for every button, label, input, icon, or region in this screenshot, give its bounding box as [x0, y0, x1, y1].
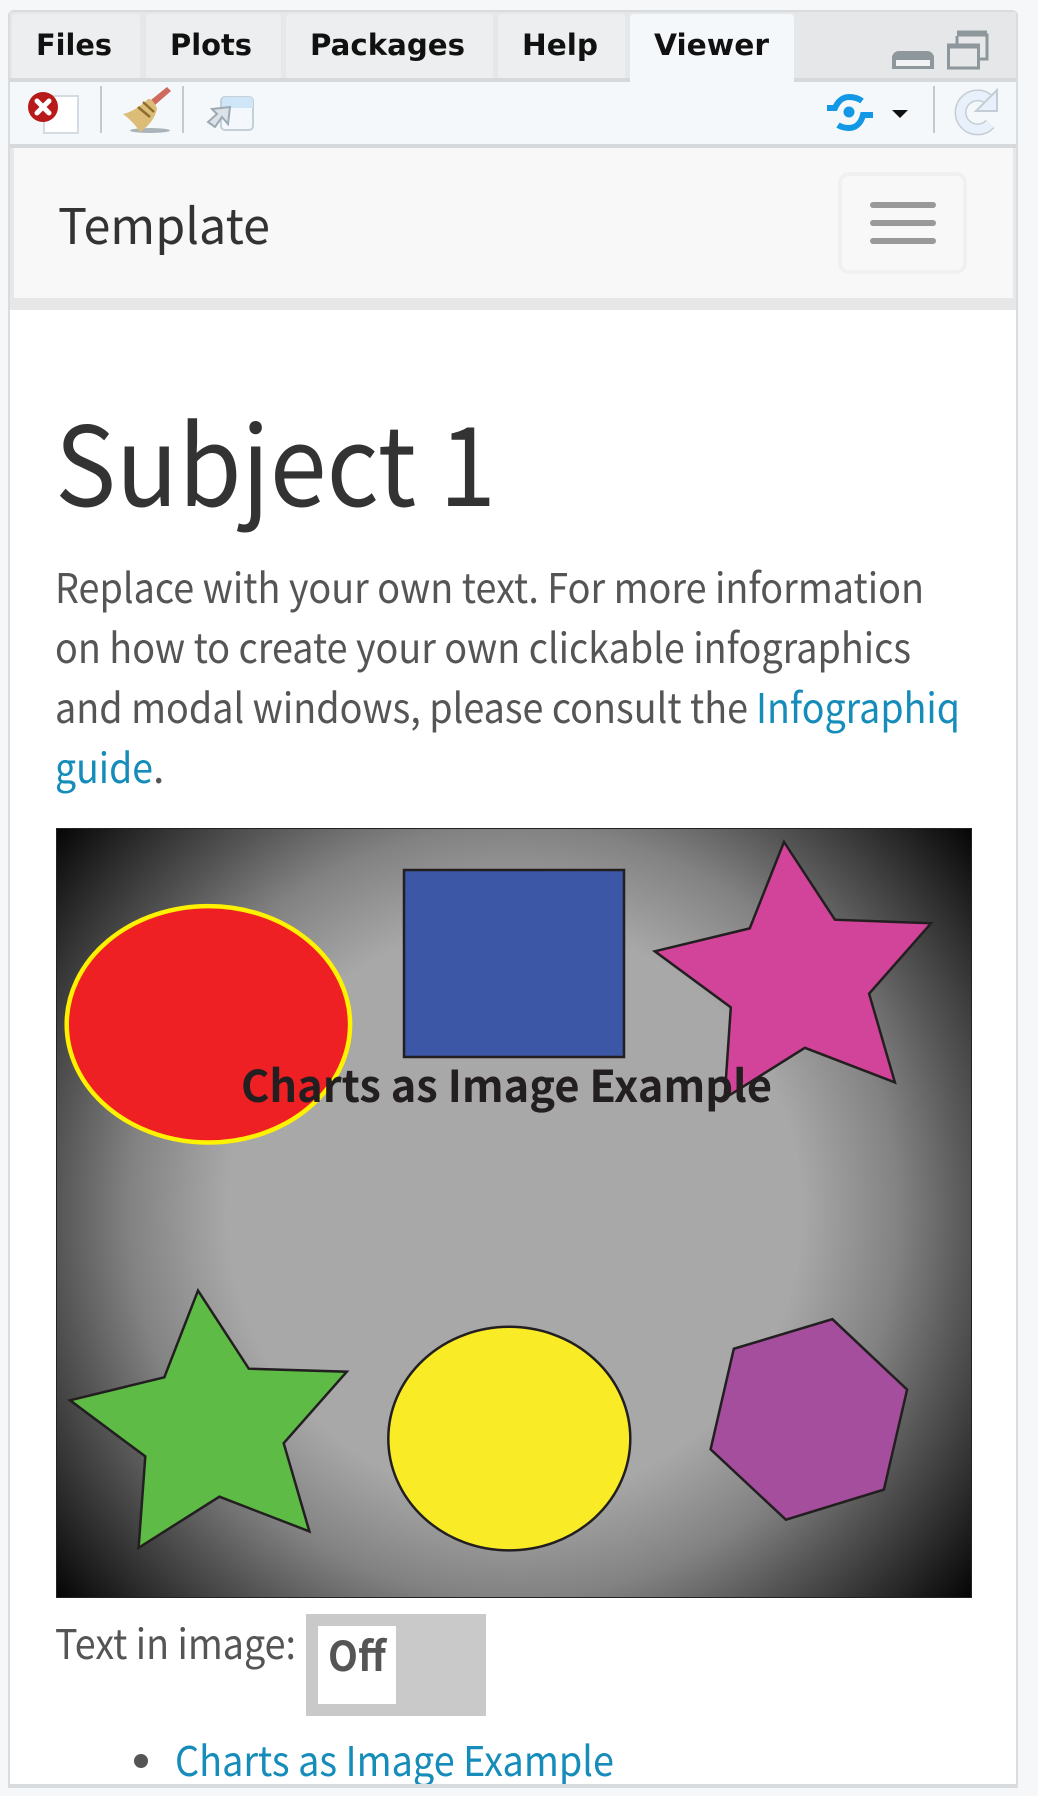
- tab bar: [10, 12, 1016, 82]
- icon: maximize pane: [948, 33, 987, 68]
- intro paragraph: and modal windows, please consult the: [55, 675, 748, 735]
- icon: clear viewer error page: [28, 92, 78, 133]
- icon: minimize pane: [892, 51, 934, 69]
- toolbar separator: [182, 86, 184, 133]
- intro paragraph: guide: [55, 735, 153, 795]
- icon: refresh: [961, 90, 997, 129]
- tab: Help: Help: [522, 28, 598, 62]
- toggle switch: [306, 1614, 486, 1716]
- link list: Charts as Image Example: [175, 1728, 614, 1788]
- tab: Packages: [286, 14, 493, 78]
- tab: Plots: Plots: [170, 28, 252, 62]
- toggle switch: Off: [328, 1623, 387, 1683]
- icon: pop out to window: [208, 97, 253, 130]
- image title: Charts as Image Example: [241, 1051, 772, 1115]
- intro paragraph: .: [153, 735, 164, 795]
- hamburger menu button: [840, 174, 965, 272]
- tab: Help: [498, 14, 625, 78]
- panel bottom edge: [8, 1784, 1018, 1788]
- tab: Viewer (active): Viewer: [654, 28, 770, 62]
- toolbar separator: [933, 86, 935, 133]
- shape: blue square: [404, 870, 624, 1057]
- toolbar: [10, 78, 1016, 148]
- interactive image: [56, 828, 972, 1598]
- label: text in image: Text in image:: [55, 1611, 296, 1671]
- navbar brand: Template: [58, 188, 270, 259]
- tab: Files: [12, 14, 140, 78]
- intro paragraph: Replace with your own text. For more information: [55, 555, 924, 615]
- shape: purple polygon: [711, 1319, 907, 1520]
- icon: sync / publish: [827, 97, 873, 128]
- intro paragraph: Infographiq: [756, 675, 960, 735]
- shape: yellow ellipse: [388, 1327, 630, 1550]
- intro paragraph: [55, 555, 960, 795]
- icon: dropdown caret: [892, 110, 908, 118]
- tab: Packages: Packages: [310, 28, 465, 62]
- tab: Viewer (active): [630, 14, 794, 82]
- toolbar separator: [100, 86, 102, 133]
- shape: red ellipse: [67, 906, 350, 1142]
- shape: green star: [70, 1291, 347, 1548]
- icon: broom: [123, 87, 171, 133]
- tab: Plots: [146, 14, 281, 78]
- heading: Subject 1: Subject 1: [55, 378, 496, 538]
- intro paragraph: on how to create your own clickable infographics: [55, 615, 911, 675]
- tab: Files: Files: [36, 28, 112, 62]
- shape: pink star: [655, 842, 931, 1098]
- page content: [10, 310, 1016, 1784]
- navbar: [10, 148, 1016, 310]
